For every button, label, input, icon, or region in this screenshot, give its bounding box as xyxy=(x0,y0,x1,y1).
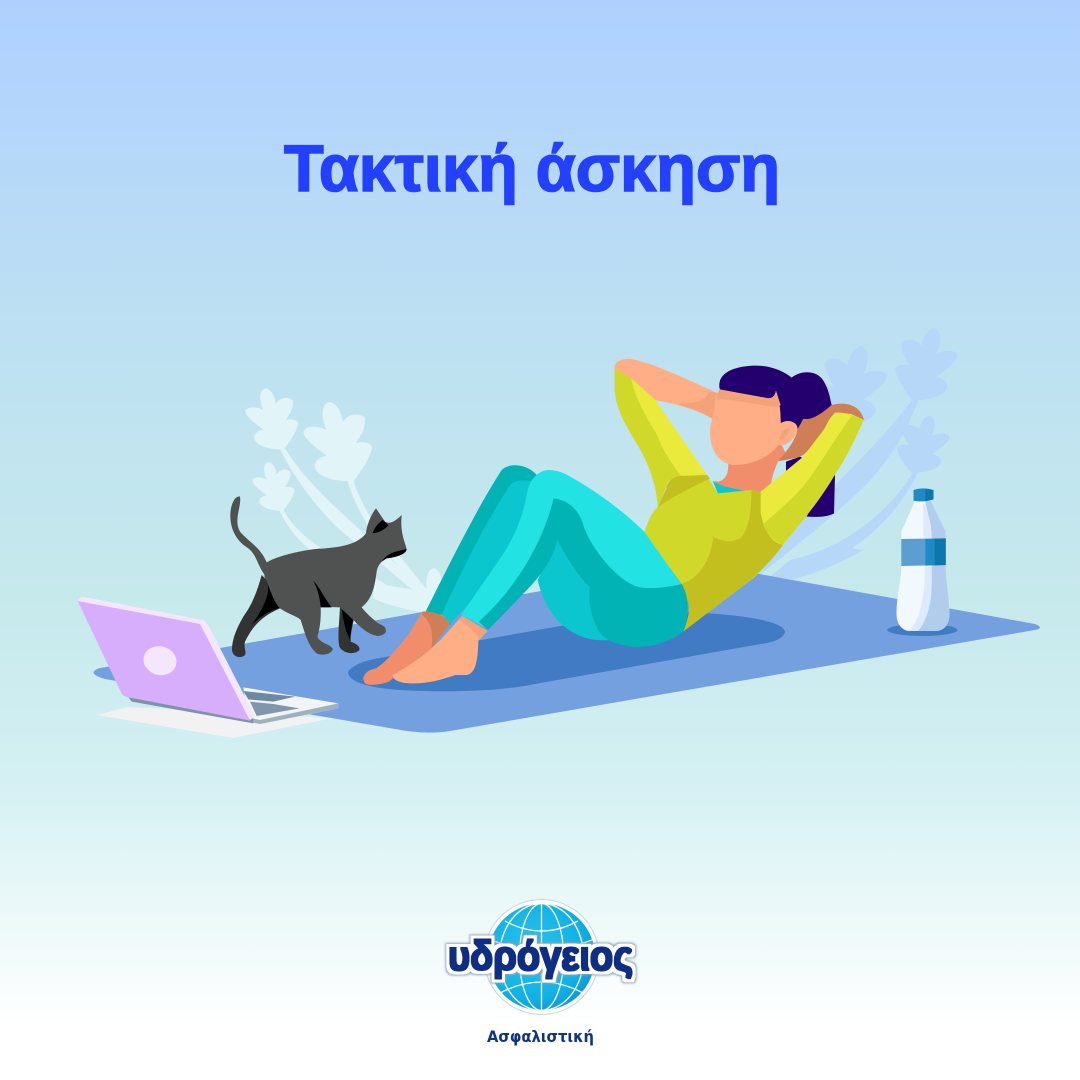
logo wordmark: υδρόγειος xyxy=(448,932,633,979)
water bottle xyxy=(887,488,958,636)
ponytail xyxy=(786,457,835,517)
bottle cap xyxy=(914,488,933,501)
cat ear shadow xyxy=(372,520,388,533)
left forearm xyxy=(615,359,718,420)
lid edge xyxy=(78,597,254,720)
plants: right blue group xyxy=(753,329,956,580)
woman doing sit-ups xyxy=(363,359,864,685)
logo globe grid xyxy=(491,904,592,1010)
torso xyxy=(644,477,783,632)
cat far back leg xyxy=(232,575,280,657)
mat shadow under woman xyxy=(348,612,785,691)
cat xyxy=(230,496,407,657)
bottle label xyxy=(901,538,946,566)
armpit shade xyxy=(658,475,710,508)
laptop xyxy=(78,597,338,724)
right sleeve xyxy=(761,412,864,545)
near ankle xyxy=(459,616,488,640)
left forearm shade xyxy=(677,392,718,420)
lid logo xyxy=(140,643,180,679)
laptop base xyxy=(243,687,338,724)
near foot xyxy=(393,616,488,683)
lid underside xyxy=(128,697,253,723)
cat chin shadow xyxy=(382,549,407,562)
bottle body xyxy=(896,501,949,631)
face xyxy=(710,389,798,465)
logo subtitle: Ασφαλιστική xyxy=(487,1027,594,1046)
far leg thigh xyxy=(538,540,611,640)
woman head xyxy=(710,366,864,517)
bottle shadow xyxy=(887,624,958,636)
logo globe xyxy=(488,904,595,1010)
neck xyxy=(713,442,787,492)
logo globe halo xyxy=(484,900,599,1014)
lid xyxy=(78,601,250,721)
laptop paper shadow xyxy=(97,707,333,738)
torso shade xyxy=(681,490,783,632)
title: Τακτική άσκηση xyxy=(284,131,780,205)
cat far front leg xyxy=(338,607,360,653)
front leg thigh xyxy=(461,470,682,628)
hair xyxy=(719,366,832,430)
collar xyxy=(713,481,752,494)
woman torso, right arm, legs and feet xyxy=(363,412,864,685)
far leg shin xyxy=(425,465,537,625)
woman lower body and raised arm xyxy=(425,359,718,640)
exercise mat xyxy=(94,563,1040,733)
far ankle xyxy=(422,612,450,648)
bottle shading xyxy=(918,501,949,631)
ear inner xyxy=(779,428,790,441)
far foot xyxy=(363,612,450,685)
left sleeve xyxy=(615,368,707,508)
plants: left pale group xyxy=(247,389,442,613)
logo: Υδρόγειος xyxy=(448,900,633,1046)
back of neck xyxy=(778,404,864,461)
keyboard xyxy=(243,691,295,702)
cat belly shadow xyxy=(313,581,332,607)
forehead shade xyxy=(717,389,781,407)
front leg shade xyxy=(479,498,688,647)
cat body xyxy=(230,496,407,655)
